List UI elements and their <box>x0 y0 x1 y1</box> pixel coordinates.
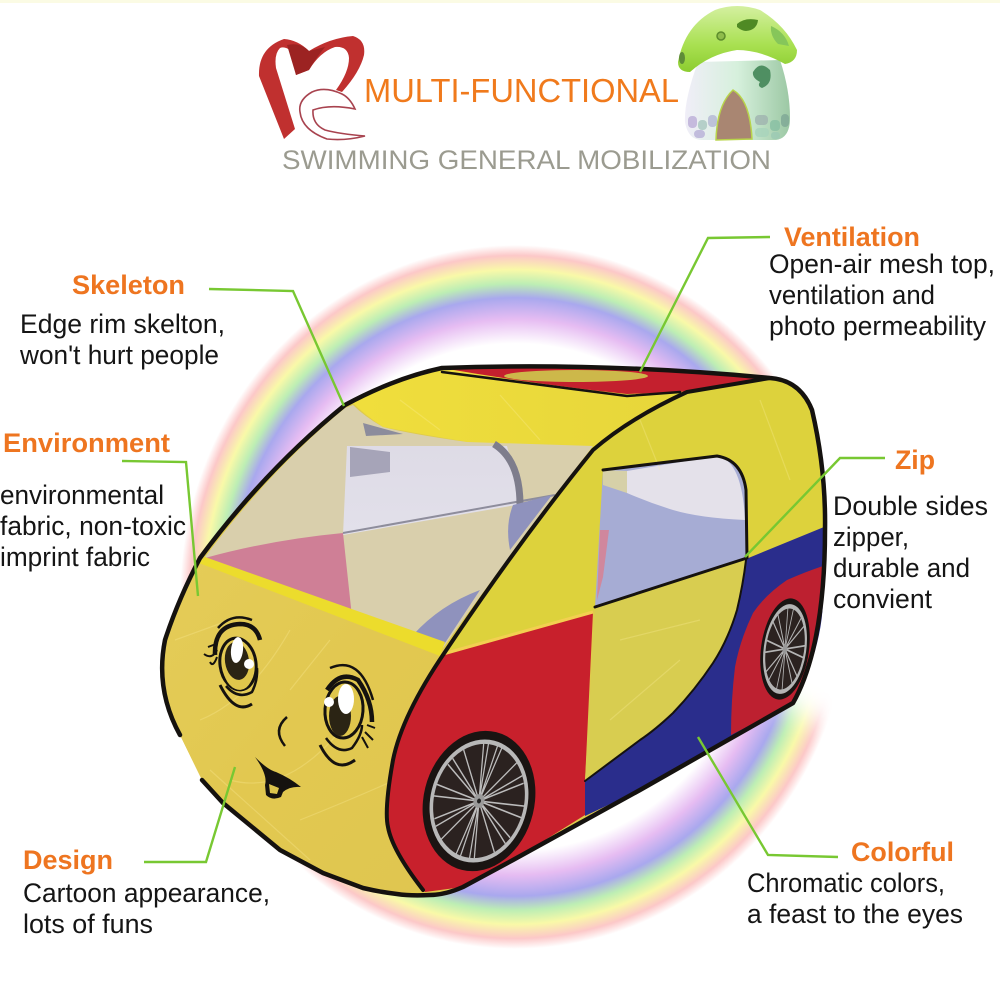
text block: skeleton: Edge rim skelton, <box>20 309 225 339</box>
nose <box>279 717 287 746</box>
text block: ventilation: Ventilation <box>784 222 920 252</box>
text block: skeleton: won't hurt people <box>19 340 219 370</box>
text block: zip: Zip <box>895 445 935 475</box>
windshield mesh <box>205 405 593 648</box>
text block: environment: fabric, non-toxic <box>0 511 186 541</box>
roof red strip with mesh hatch <box>442 367 770 394</box>
text block: ventilation: Open-air mesh top, <box>769 249 995 279</box>
callout line: colorful <box>698 737 838 857</box>
text block: ventilation: photo permeability <box>769 311 987 341</box>
logo: red heart monogram <box>259 36 365 140</box>
callout line: skeleton <box>209 289 344 406</box>
text block: environment: imprint fabric <box>0 542 150 572</box>
text block: design <box>23 845 270 939</box>
title: MULTI-FUNCTIONAL <box>364 72 679 109</box>
callout line: design <box>144 767 235 862</box>
door <box>716 90 752 140</box>
text block: skeleton: Skeleton <box>72 270 185 300</box>
text block: ventilation: ventilation and <box>769 280 935 310</box>
mouth <box>255 757 301 799</box>
text block: environment <box>0 428 186 572</box>
rear wheel <box>754 595 816 703</box>
text block: zip: Double sides <box>833 491 988 521</box>
callout line: zip <box>745 458 885 557</box>
outlines <box>162 366 825 895</box>
front wheel <box>408 719 550 883</box>
text block: design: Cartoon appearance, <box>23 878 270 908</box>
text block: colorful: Colorful <box>851 837 954 867</box>
callout line: ventilation <box>640 237 770 372</box>
side window mesh <box>595 456 747 607</box>
cap spots <box>679 19 789 64</box>
text block: design: lots of funs <box>23 909 153 939</box>
left eye <box>204 617 260 707</box>
icon: mushroom house <box>678 6 797 140</box>
red front side panel <box>387 612 593 892</box>
text block: zip <box>833 445 988 614</box>
text block: zip: convient <box>833 584 933 614</box>
text block: colorful: a feast to the eyes <box>747 899 963 929</box>
yellow door panel <box>585 560 746 781</box>
rainbow halo <box>100 245 920 949</box>
mushroom cap <box>678 6 797 72</box>
text block: environment: Environment <box>3 428 170 458</box>
text block: ventilation <box>769 222 995 341</box>
car tent <box>162 366 825 895</box>
text block: colorful <box>747 837 963 929</box>
window <box>753 65 771 88</box>
fabric folds on face <box>175 620 395 860</box>
fabric folds on side <box>400 395 790 720</box>
cobblestones <box>688 114 789 139</box>
red rear arch <box>731 566 823 735</box>
roof panel <box>353 368 770 450</box>
right eye <box>320 665 375 765</box>
upper side panel <box>443 380 824 652</box>
subtitle: SWIMMING GENERAL MOBILIZATION <box>282 145 771 175</box>
text block: skeleton <box>19 270 225 370</box>
blue lower panel <box>585 527 824 816</box>
text block: zip: durable and <box>833 553 970 583</box>
top edge band <box>0 0 1000 3</box>
text block: zip: zipper, <box>833 522 909 552</box>
zipper band <box>199 557 445 656</box>
text block: environment: environmental <box>0 480 164 510</box>
front yellow face panel <box>162 563 445 894</box>
text block: colorful: Chromatic colors, <box>747 868 945 898</box>
silhouette base <box>162 366 825 895</box>
text block: design: Design <box>23 845 113 875</box>
callout line: environment <box>122 461 198 596</box>
